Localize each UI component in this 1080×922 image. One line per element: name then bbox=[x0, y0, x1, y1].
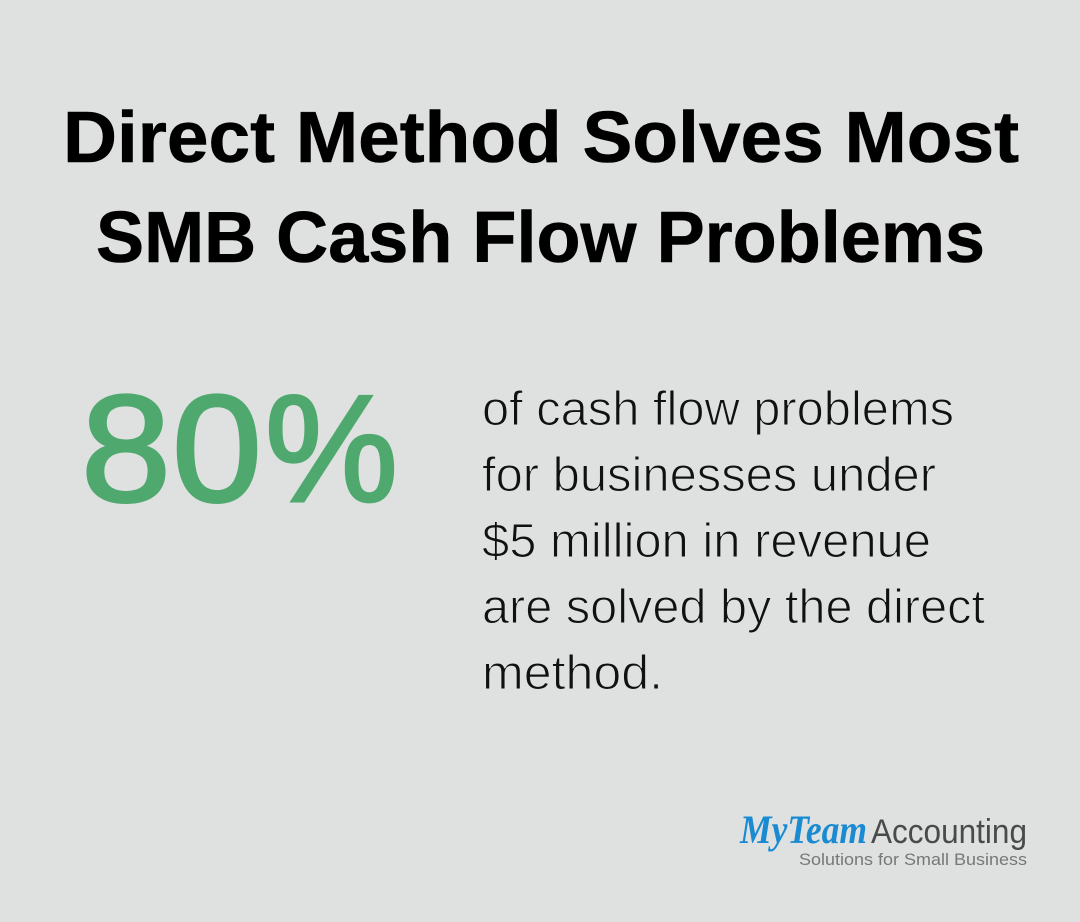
logo: MyTeam Accounting bbox=[739, 807, 1027, 869]
description text: $5 million in revenue bbox=[482, 515, 931, 568]
title bbox=[63, 98, 1019, 278]
description text: are solved by the direct bbox=[482, 581, 985, 634]
logo: MyTeam Accounting: Accounting bbox=[871, 813, 1027, 851]
statistic: 80% bbox=[81, 364, 398, 534]
logo: MyTeam Accounting: Solutions for Small Business bbox=[799, 850, 1027, 869]
statistic: 80%: % bbox=[265, 364, 398, 534]
description text: method. bbox=[482, 647, 663, 700]
description text: for businesses under bbox=[482, 449, 936, 502]
description text bbox=[482, 383, 985, 700]
statistic: 80%: 8 bbox=[81, 364, 171, 534]
statistic: 80%: 0 bbox=[172, 364, 262, 534]
title: SMB Cash Flow Problems bbox=[96, 198, 985, 278]
description text: of cash flow problems bbox=[482, 383, 954, 436]
logo: MyTeam Accounting: MyTeam bbox=[739, 807, 867, 852]
title: Direct Method Solves Most bbox=[63, 98, 1019, 178]
